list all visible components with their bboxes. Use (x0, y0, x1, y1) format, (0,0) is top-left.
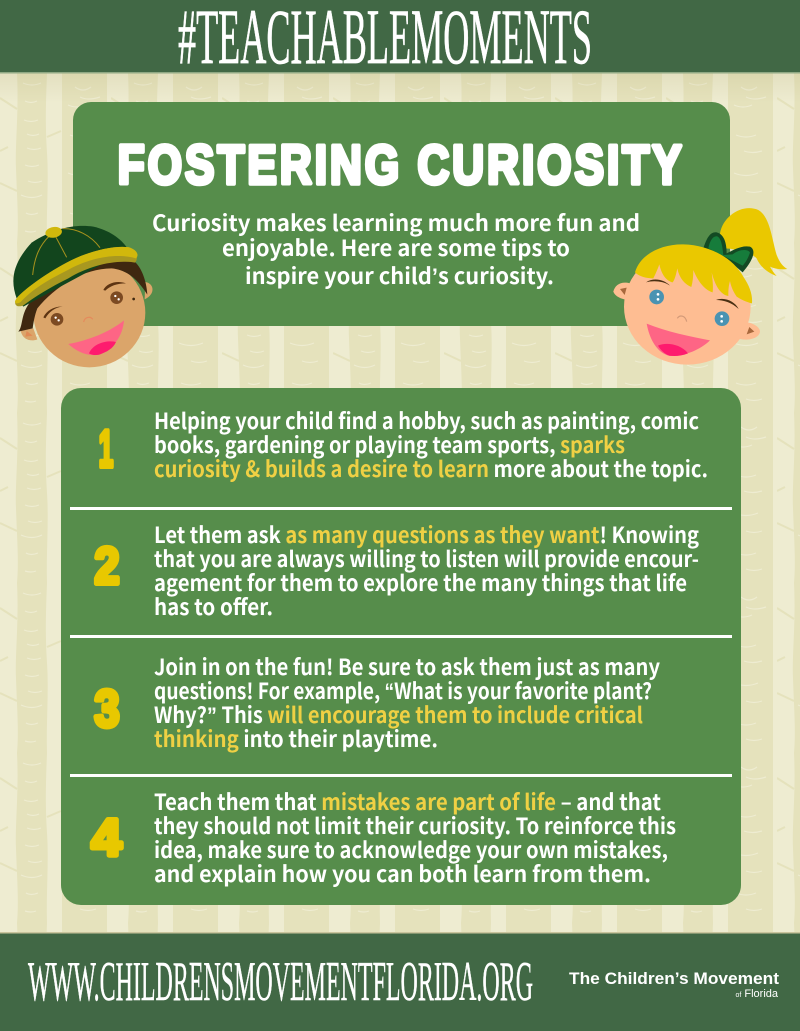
tip 1 (99, 404, 708, 484)
number 2: 2 (94, 538, 120, 596)
intro text: inspire your child’s curiosity. (245, 259, 554, 291)
tip 4 text: they should not limit their curiosity. To reinforce this (154, 809, 676, 841)
tip 2 (94, 518, 699, 622)
logo: The Children's Movement of Florida: of Florida (735, 988, 779, 1000)
tip 3 (94, 650, 660, 754)
number 4: 4 (92, 810, 122, 868)
tip 3 text: thinking into their playtime. (154, 722, 438, 754)
intro text (152, 206, 640, 291)
tip 3 text: questions! For example, “What is your favorite plant? (154, 674, 652, 706)
tip 1 text: books, gardening or playing team sports, sparks (154, 428, 625, 460)
tip 3 text (154, 650, 660, 754)
tip 4 text: and explain how you can both learn from them. (154, 857, 651, 889)
icon: girl face with ponytail (613, 208, 787, 365)
tip 3 text: Join in on the fun! Be sure to ask them just as many (154, 650, 660, 682)
footer band (0, 932, 800, 1031)
tip 2 text: agement for them to explore the many things that life (154, 566, 687, 598)
header band (0, 0, 800, 80)
tip 1 text (154, 404, 708, 484)
tip 2 text: Let them ask as many questions as they want! Knowing (154, 518, 699, 550)
tip 2 text (154, 518, 699, 622)
tip 2 text: that you are always willing to listen will provide encour- (154, 542, 699, 574)
number 3: 3 (94, 680, 120, 738)
logo: The Children's Movement of Florida (569, 969, 779, 1000)
tip 4 (92, 785, 676, 889)
tip 4 text: idea, make sure to acknowledge your own mistakes, (154, 833, 668, 865)
tip 1 text: curiosity & builds a desire to learn more about the topic. (154, 452, 708, 484)
tip 1 text: Helping your child find a hobby, such as painting, comic (154, 404, 699, 436)
number 1: 1 (99, 420, 113, 478)
tip 4 text (154, 785, 676, 889)
tip 2 text: has to offer. (154, 590, 273, 622)
panel: tips (61, 388, 741, 905)
icon: boy face with cap (13, 226, 152, 367)
panel: intro (73, 102, 730, 326)
tip 4 text: Teach them that mistakes are part of life – and that (154, 785, 661, 817)
tip 3 text: Why?” This will encourage them to include critical (154, 698, 643, 730)
intro text: enjoyable. Here are some tips to (222, 231, 570, 263)
intro text: Curiosity makes learning much more fun and (152, 206, 640, 238)
logo: The Children's Movement of Florida: The Children’s Movement (569, 969, 779, 988)
title: FOSTERING CURIOSITY (118, 134, 685, 196)
